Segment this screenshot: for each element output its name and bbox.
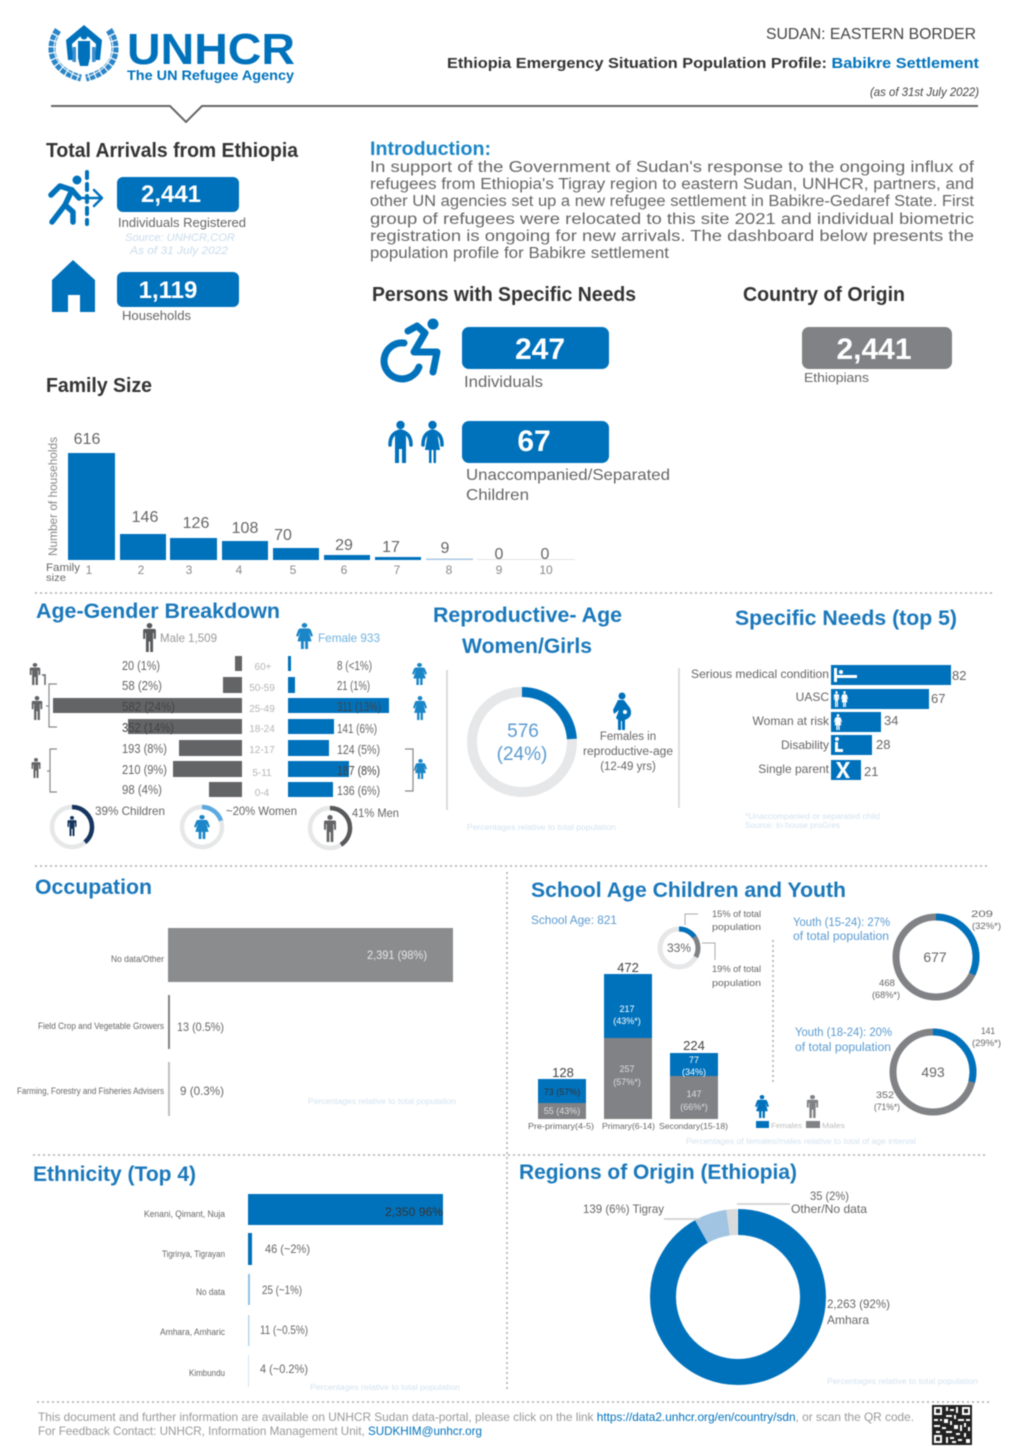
donut: school age share: population [712,922,761,933]
donut: children [52,804,165,847]
donut: school age share: 19% of total [712,964,761,975]
panel: specific needs top 5 [691,607,966,830]
caption: females in reproductive age: Females in [600,731,656,743]
age group labels [249,662,275,799]
bar chart: family size: 0 [495,546,504,563]
bar chart: ethnicity: 4 (~0.2%) [260,1362,308,1376]
bar chart: family size: 1 [86,563,93,577]
text: youth 15-24: Youth (15-24): 27% [793,917,890,929]
bar chart: occupation: No data/Other [111,954,164,964]
age group labels: 18-24 [249,724,275,735]
heading: persons with specific needs: Persons with Specific Needs [372,284,636,306]
stat: individuals with needs: 247 [515,333,565,366]
bar chart: family size: 9 [496,563,503,577]
stacked bar chart: school levels [528,960,728,1131]
legend: females and males [755,1095,846,1130]
donut: reproductive-age share [472,692,572,792]
stat: individuals with needs: Individuals [464,374,543,391]
stacked bar chart: school levels: Secondary(15-18) [659,1121,728,1131]
bar chart: specific needs: 82 [952,668,966,683]
bar chart: family size: Family [46,562,81,574]
note: *Unaccompanied or separated child [745,812,880,821]
donut: youth 18-24: 493 [921,1064,945,1080]
female value labels: 136 (6%) [337,784,380,798]
icon: pregnant woman [613,692,631,730]
heading: reproductive-age: Reproductive- Age [433,604,622,627]
stacked bar chart: school levels: 128 [552,1065,574,1080]
bar chart: specific needs: UASC [796,690,829,704]
logo tagline: The UN Refugee Agency [127,67,294,83]
panel: school age children and youth [528,879,1001,1146]
population pyramid: male bars [53,656,242,797]
header: UNHCR logo [52,25,295,83]
brackets: male adult and child [46,684,57,792]
donut: youth 18-24 [874,1026,1001,1113]
stacked bar chart: school levels: Primary(6-14) [602,1121,655,1131]
footer: data portal and contact: For Feedback Contact: UNHCR, Information Management Unit, SUDKHIM@unhcr.org [38,1424,482,1438]
stacked bar chart: school levels: (43%*) [613,1016,641,1026]
donut: women: ~20% Women [226,804,297,818]
bar chart: ethnicity: 2,350 96% [385,1205,443,1219]
female value labels [337,659,381,798]
bar chart: ethnicity: No data [196,1287,225,1297]
note: Source: in-house proGres [745,821,840,830]
bar chart: ethnicity: 11 (~0.5%) [260,1323,308,1337]
bar chart: family size: 8 [446,563,453,577]
text: youth 15-24: of total population [793,931,889,943]
donut: regions of origin [583,1189,890,1372]
male value labels [122,659,175,797]
text block: introduction body: In support of the Government of Sudan's response to the ongoing influx of [370,159,975,176]
logo emblem [52,25,115,78]
bar chart: family size: 17 [382,539,400,556]
stat: households: 1,119 [139,277,197,304]
donut: men: 41% Men [352,806,399,820]
age group labels: 12-17 [249,745,275,756]
female value labels: 21 (1%) [337,679,370,693]
icon: QR code [932,1405,972,1445]
heading: reproductive-age [433,604,622,658]
bar chart: occupation: Field Crop and Vegetable Growers [38,1021,164,1031]
donut: school age share: 15% of total [712,909,761,920]
text: youth 18-24: of total population [795,1042,891,1054]
note: Percentages relative to total population [827,1377,978,1386]
bar chart: family size: 616 [74,431,100,448]
stat: unaccompanied children: 67 [517,425,551,458]
stat: individuals: Individuals Registered [118,215,246,230]
stacked bar chart: school levels: (57%*) [613,1077,641,1087]
bar chart: ethnicity: Tigrinya, Tigrayan [162,1249,225,1259]
bar chart: specific needs: Woman at risk [753,714,830,728]
male value labels: 98 (4%) [122,783,162,797]
age group labels: 5-11 [252,768,272,779]
icon: two children [390,421,442,463]
bar chart: family size: 0 [541,546,550,563]
bar chart: specific needs: 21 [864,764,878,779]
stat: ethiopians: Ethiopians [804,370,870,385]
bar chart: ethnicity [144,1194,443,1387]
panel: regions of origin [519,1161,978,1386]
bar chart: family size: 126 [183,515,209,532]
bar chart: family size: 4 [236,563,243,577]
footer: data portal and contact: This document and further information are available on UNHCR Sudan data-portal, please click on the link https://data2.unhcr.org/en/country/sdn, or scan the QR code. [38,1410,914,1424]
icons: male age groups [30,663,45,778]
stat: unaccompanied children: Unaccompanied/Separated [466,467,670,484]
stacked bar chart: school levels: 73 (57%) [544,1087,580,1097]
stat: households: Households [122,308,192,323]
bar chart: ethnicity: Amhara, Amharic [160,1327,225,1337]
bar chart: specific needs: Serious medical condition [691,667,829,681]
heading: introduction: Introduction: [370,139,491,160]
stacked bar chart: school levels: 224 [683,1038,705,1053]
stacked bar chart: school levels: 77 [689,1055,699,1065]
male value labels: 58 (2%) [122,679,162,693]
text block: introduction body: other UN agencies set up a new refugee settlement in Babikre-Gedaref State. First [370,193,975,210]
stacked bar chart: school levels: 472 [617,960,639,975]
stacked bar chart: school levels: 217 [619,1004,635,1014]
donut: school age share: population [712,978,761,989]
female value labels: 187 (8%) [337,764,380,778]
panel: occupation [17,876,456,1116]
bar chart: family size: 70 [274,527,292,544]
donut: men [310,806,399,848]
bar chart: family size: Number of households [48,437,60,556]
text: youth 18-24: Youth (18-24): 20% [795,1027,892,1039]
legend: females and males: Males [822,1123,846,1130]
legend: male [143,623,217,652]
panel: ethnicity [33,1163,460,1392]
note: Percentages relative to total population [310,1383,460,1392]
note: Percentages relative to total population [467,823,616,832]
panel: introduction [370,139,975,262]
donut: children: 39% Children [95,804,165,818]
bar chart: specific needs: 34 [884,713,898,728]
bar chart: family size: 9 [441,540,450,557]
bar chart: family size [46,431,575,584]
header: document title [447,26,979,99]
text: youth 18-24 [795,1027,892,1054]
bar chart: family size: 108 [232,520,258,537]
legend: female [296,623,380,649]
age group labels: 50-59 [249,683,275,694]
stacked bar chart: school levels: 257 [619,1064,635,1074]
bar chart: family size: 6 [341,563,348,577]
female value labels: 141 (6%) [337,722,377,736]
male value labels: 582 (24%) [122,700,175,714]
header: document title: SUDAN: EASTERN BORDER [766,26,976,43]
bar chart: occupation: 2,391 (98%) [367,948,427,962]
male value labels: 210 (9%) [122,763,167,777]
panel: persons with specific needs [372,284,670,504]
panel: total arrivals [46,140,299,323]
stat: unaccompanied children [462,421,670,504]
donut: school age share: 33% [667,941,691,955]
bar chart: family size: size [46,573,66,584]
text block: introduction body: refugees from Ethiopia's Tigray region to eastern Sudan, UNHCR, partners, and [370,176,974,193]
bar chart: specific needs [691,665,966,780]
bar chart: family size: 146 [132,509,158,526]
male value labels: 193 (8%) [122,742,167,756]
age group labels: 60+ [255,662,272,673]
bar chart: family size: 5 [290,563,297,577]
stat: individuals [117,177,246,257]
text block: introduction body [370,159,975,262]
legend: male: Male 1,509 [160,631,217,645]
donut: regions of origin: 35 (2%) [810,1189,849,1203]
note: Percentages of females/males relative to total of age interval [686,1137,916,1146]
caption: females in reproductive age: (12-49 yrs) [600,761,656,773]
donut: youth 15-24 [872,909,1001,1001]
panel: reproductive-age women [433,604,673,832]
male value labels: 20 (1%) [122,659,160,673]
panel: family size [46,375,575,584]
donut: youth 18-24: (71%*) [874,1102,900,1113]
age group labels: 25-49 [249,704,275,715]
donut: regions of origin: Other/No data [791,1202,867,1216]
bar chart: occupation [17,928,453,1116]
bar chart: ethnicity: Kenani, Qimant, Nuja [144,1209,225,1219]
panel: country of origin [743,284,952,385]
donut: regions of origin: Amhara [827,1313,869,1327]
icon: person crossing border [51,172,102,224]
header: document title: Ethiopia Emergency Situation Population Profile: Babikre Settlement [447,55,979,72]
panel: age-gender breakdown [30,600,427,848]
donut: youth 18-24: 352 [876,1090,894,1101]
heading: occupation: Occupation [35,876,152,899]
icons: female age groups [412,663,427,779]
donut: youth 15-24: 677 [923,949,947,965]
text block: introduction body: registration is ongoing for new arrivals. The dashboard below presents the [370,228,974,245]
bar chart: ethnicity: Kimbundu [189,1368,225,1378]
age group labels: 0-4 [255,788,270,799]
stacked bar chart: school levels: (66%*) [680,1102,708,1112]
heading: country of origin: Country of Origin [743,284,905,306]
heading: specific needs: Specific Needs (top 5) [735,607,957,630]
stat: ethiopians: 2,441 [836,333,912,366]
note [745,812,880,830]
heading: family size: Family Size [46,375,152,397]
female value labels: 124 (5%) [337,743,380,757]
stat: individuals: As of 31 July 2022 [129,245,228,257]
population pyramid: female bars [288,656,389,797]
logo wordmark: UNHCR [127,25,295,74]
bar chart: specific needs: Disability [781,738,829,752]
icon: house [52,260,95,312]
legend: females and males: Females [771,1123,803,1130]
donut: reproductive-age share: 576 [507,721,539,742]
footer: data portal and contact [38,1410,914,1438]
donut: youth 18-24: 141 [981,1026,995,1037]
donut: women [182,804,297,847]
text block: introduction body: group of refugees were relocated to this site 2021 and individual biometric [370,211,974,228]
stat: unaccompanied children: Children [466,487,529,504]
bar chart: ethnicity: 46 (~2%) [265,1242,310,1256]
donut: reproductive-age share: (24%) [497,744,547,765]
bar chart: occupation: Farming, Forestry and Fisheries Advisers [17,1086,164,1096]
caption: females in reproductive age: reproductive-age [583,746,673,758]
stacked bar chart: school levels: Pre-primary(4-5) [528,1121,594,1131]
donut: youth 15-24: 468 [879,978,895,989]
header: document title: (as of 31st July 2022) [870,87,979,99]
donut: youth 15-24: (32%*) [972,921,1001,932]
male value labels: 352 (14%) [122,721,174,735]
heading: school age: School Age Children and Youth [531,879,846,902]
stacked bar chart: school levels: 147 [686,1089,702,1099]
donut: youth 15-24: 209 [971,909,993,920]
bar chart: specific needs: 28 [876,737,890,752]
bar chart: occupation: 9 (0.3%) [180,1084,224,1098]
bar chart: occupation: 13 (0.5%) [177,1020,224,1034]
bar chart: family size: 3 [186,563,193,577]
donut: youth 15-24: (68%*) [872,990,900,1001]
donut: regions of origin: 139 (6%) Tigray [583,1202,664,1216]
note: Percentages relative to total population [308,1097,456,1106]
stacked bar chart: school levels: (34%) [682,1067,706,1077]
icons inside bars [834,668,857,778]
label: school age total: School Age: 821 [531,913,617,927]
stat: individuals: 2,441 [141,181,201,208]
female value labels: 311 (13%) [337,700,381,714]
bar chart: family size: 10 [539,563,553,577]
heading: age-gender: Age-Gender Breakdown [36,600,280,623]
stat: households [117,272,239,323]
donut: regions of origin: 2,263 (92%) [827,1297,890,1311]
bracket: female child [405,749,416,791]
heading: reproductive-age: Women/Girls [462,635,592,658]
donut: school age share [660,909,761,989]
text: youth 15-24 [793,917,890,943]
bar chart: specific needs: 67 [931,691,945,706]
icon: wheelchair [384,318,438,379]
text block: introduction body: population profile for Babikre settlement [370,245,670,262]
donut: youth 18-24: (29%*) [972,1038,1001,1049]
bar chart: family size: 29 [335,537,353,554]
bar chart: ethnicity: 25 (~1%) [262,1283,302,1297]
heading: regions of origin: Regions of Origin (Ethiopia) [519,1161,797,1184]
heading: ethnicity: Ethnicity (Top 4) [33,1163,196,1186]
stacked bar chart: school levels: 55 (43%) [544,1106,580,1116]
bar chart: family size: 7 [394,563,401,577]
caption: females in reproductive age [583,731,673,773]
stat: ethiopians [802,327,952,385]
heading: total arrivals: Total Arrivals from Ethiopia [46,140,299,162]
stat: individuals: Source: UNHCR,COR [125,232,235,244]
stat: individuals with needs [462,327,609,391]
bar chart: family size: 2 [138,563,145,577]
legend: female: Female 933 [318,631,380,645]
bar chart: specific needs: Single parent [758,762,830,776]
female value labels: 8 (<1%) [337,659,372,673]
